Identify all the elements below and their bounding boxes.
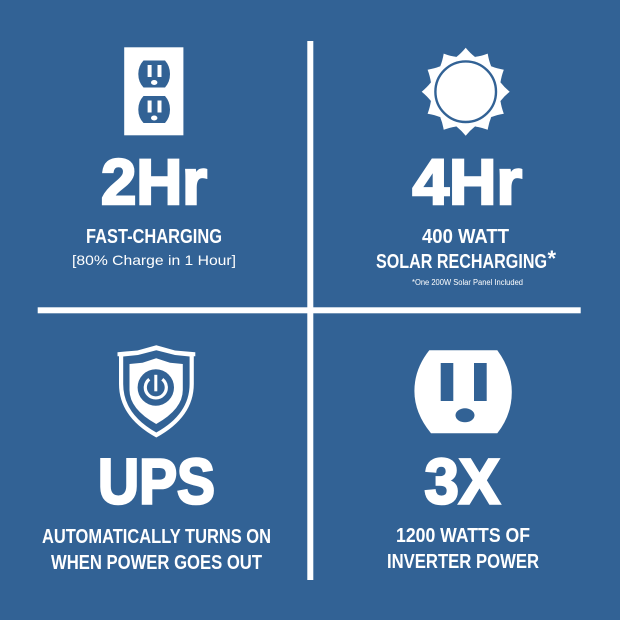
- heading: UPS: UPS: [98, 445, 215, 517]
- label: solar recharging: SOLAR RECHARGING: [376, 251, 547, 273]
- note: 80% charge in 1 hour: [80% Charge in 1 Hour]: [72, 252, 236, 268]
- panel: fast charging: [72, 47, 236, 268]
- heading: 2Hr: 2Hr: [101, 146, 207, 218]
- label: when power goes out: WHEN POWER GOES OUT: [51, 552, 262, 574]
- asterisk: *: [548, 246, 556, 271]
- label: 1200 watts of: 1200 WATTS OF: [396, 525, 530, 547]
- icon: shield with power symbol: [118, 345, 195, 438]
- label: inverter power: INVERTER POWER: [387, 551, 539, 573]
- panel: inverter power: [387, 350, 539, 573]
- heading: 3X: 3X: [424, 445, 500, 517]
- icon: sun: [422, 48, 510, 136]
- label: automatically turns on: AUTOMATICALLY TURNS ON: [42, 526, 271, 548]
- label: 400 watt: 400 WATT: [422, 226, 509, 248]
- icon: duplex wall outlet: [124, 47, 183, 135]
- heading: 4Hr: 4Hr: [412, 146, 522, 218]
- label: fast-charging: FAST-CHARGING: [86, 226, 222, 248]
- panel: UPS: [42, 345, 271, 574]
- footnote: solar panel included: *One 200W Solar Panel Included: [412, 278, 523, 287]
- panel: solar recharging: [376, 48, 556, 287]
- icon: single outlet: [414, 350, 512, 433]
